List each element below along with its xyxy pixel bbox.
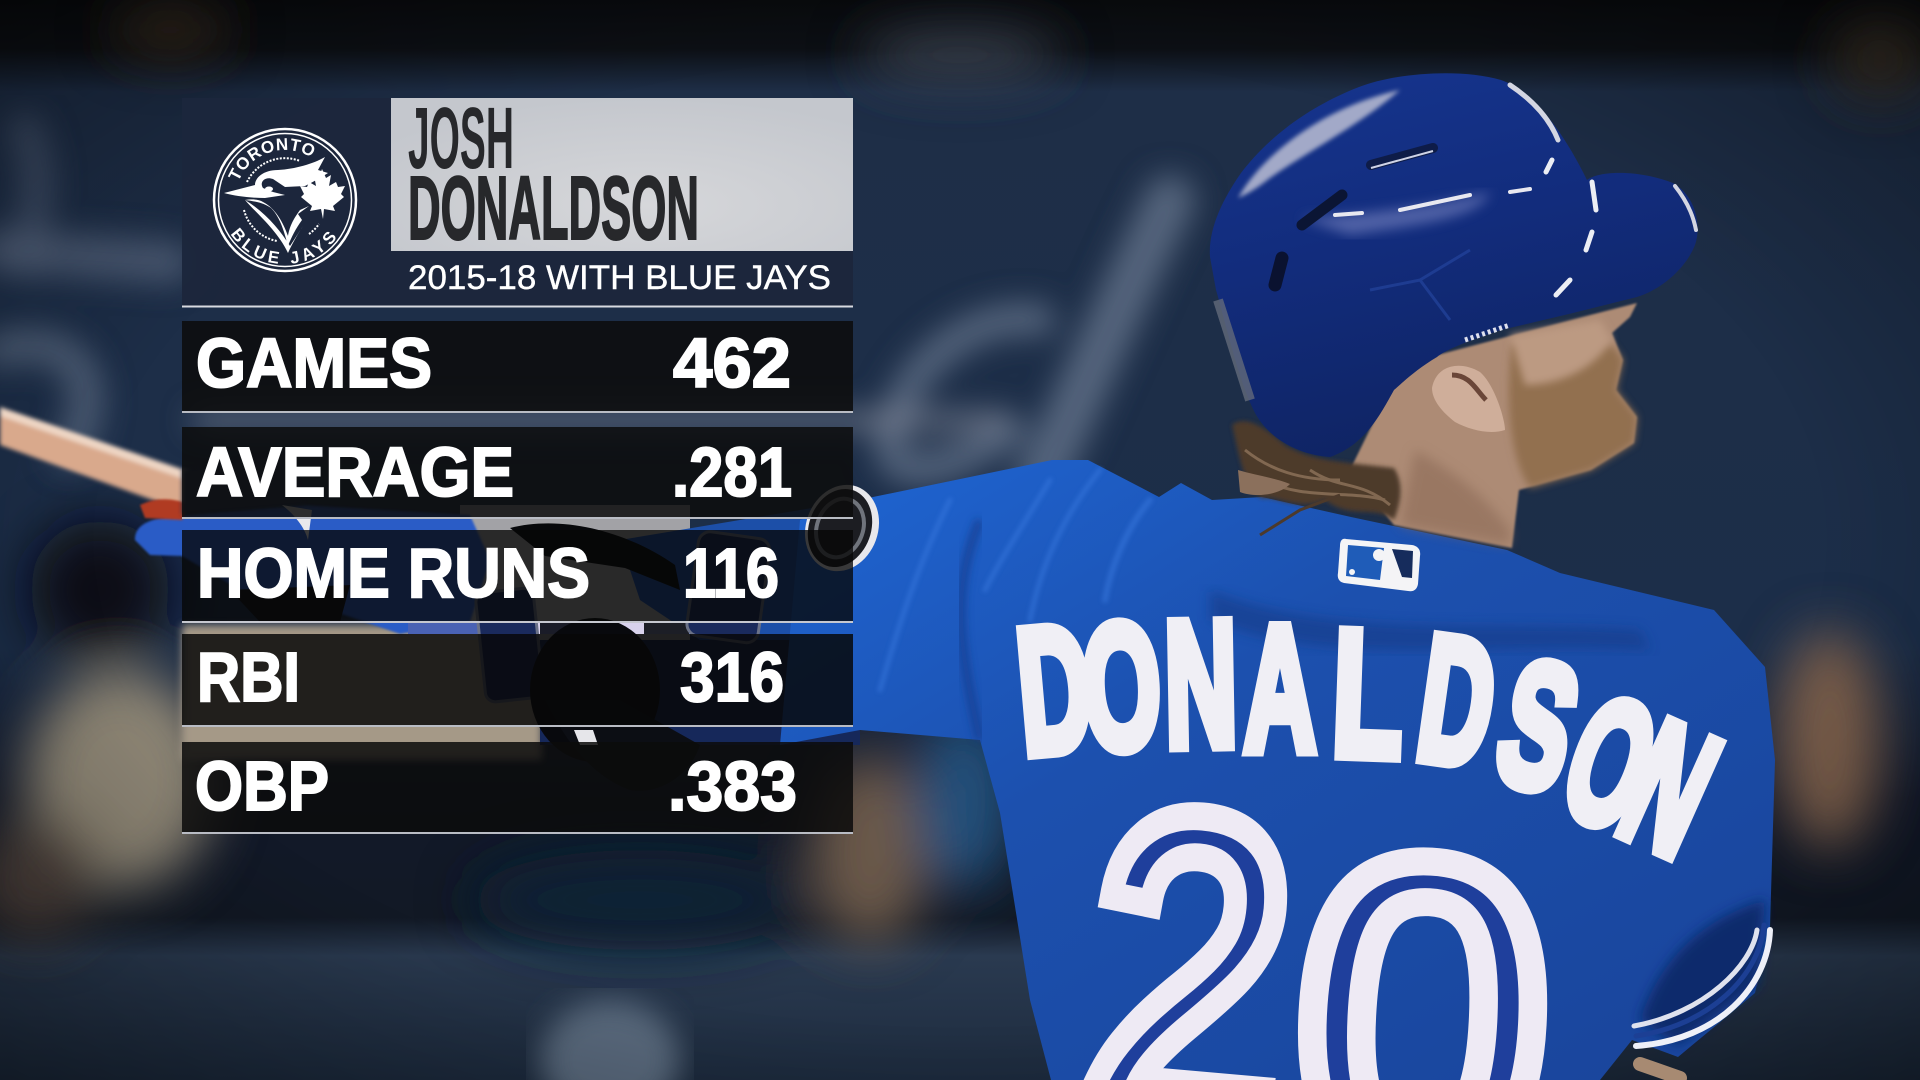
neck, face and beard	[1350, 303, 1637, 548]
stat row: OBP: OBP	[195, 747, 329, 825]
stat row: games	[182, 321, 853, 413]
jersey name: N	[1163, 583, 1239, 784]
stat row: RBI	[182, 634, 853, 727]
team logo: Toronto Blue Jays	[212, 128, 358, 272]
stat row: OBP: .383	[668, 747, 797, 825]
jersey number	[1070, 725, 1557, 1080]
stat row: home runs: HOME RUNS	[197, 534, 590, 612]
stat row: home runs: 116	[683, 534, 779, 612]
jersey	[780, 460, 1775, 1080]
stat row: games: 462	[673, 324, 791, 402]
ear	[1432, 366, 1505, 432]
arm and batting glove	[135, 450, 860, 791]
stat row: average: .281	[672, 433, 792, 511]
player name plate	[391, 90, 853, 259]
jersey name: N	[1596, 682, 1744, 894]
stat row: RBI: RBI	[197, 638, 300, 716]
bat	[0, 407, 190, 512]
team logo: Toronto Blue Jays: BLUE JAYS	[230, 228, 336, 264]
stat row: average: AVERAGE	[196, 433, 514, 511]
header panel	[182, 90, 853, 308]
jersey name: O	[1541, 658, 1679, 870]
jersey name: A	[1244, 588, 1316, 788]
jersey name	[1010, 583, 1744, 894]
jersey name: O	[1078, 585, 1165, 788]
MLB patch	[1338, 539, 1420, 591]
sleeve trim	[1634, 925, 1770, 1078]
stat row: home runs	[182, 530, 853, 623]
batting helmet	[1210, 73, 1698, 457]
jersey name: D	[1010, 587, 1099, 792]
jersey name: L	[1330, 593, 1406, 795]
subtitle: 2015-18 WITH BLUE JAYS	[408, 259, 831, 297]
stat row: games: GAMES	[196, 324, 432, 402]
team logo: Toronto Blue Jays: TORONTO	[228, 138, 314, 178]
jersey name: D	[1408, 597, 1507, 805]
jersey name: S	[1481, 620, 1596, 830]
stat row: RBI: 316	[680, 638, 784, 716]
stat row: OBP	[182, 742, 853, 834]
player name plate: DONALDSON	[408, 159, 699, 259]
player name plate: JOSH	[408, 90, 514, 187]
sleeve patch	[793, 474, 891, 582]
stat row: average	[182, 427, 853, 519]
hair	[1232, 421, 1401, 535]
